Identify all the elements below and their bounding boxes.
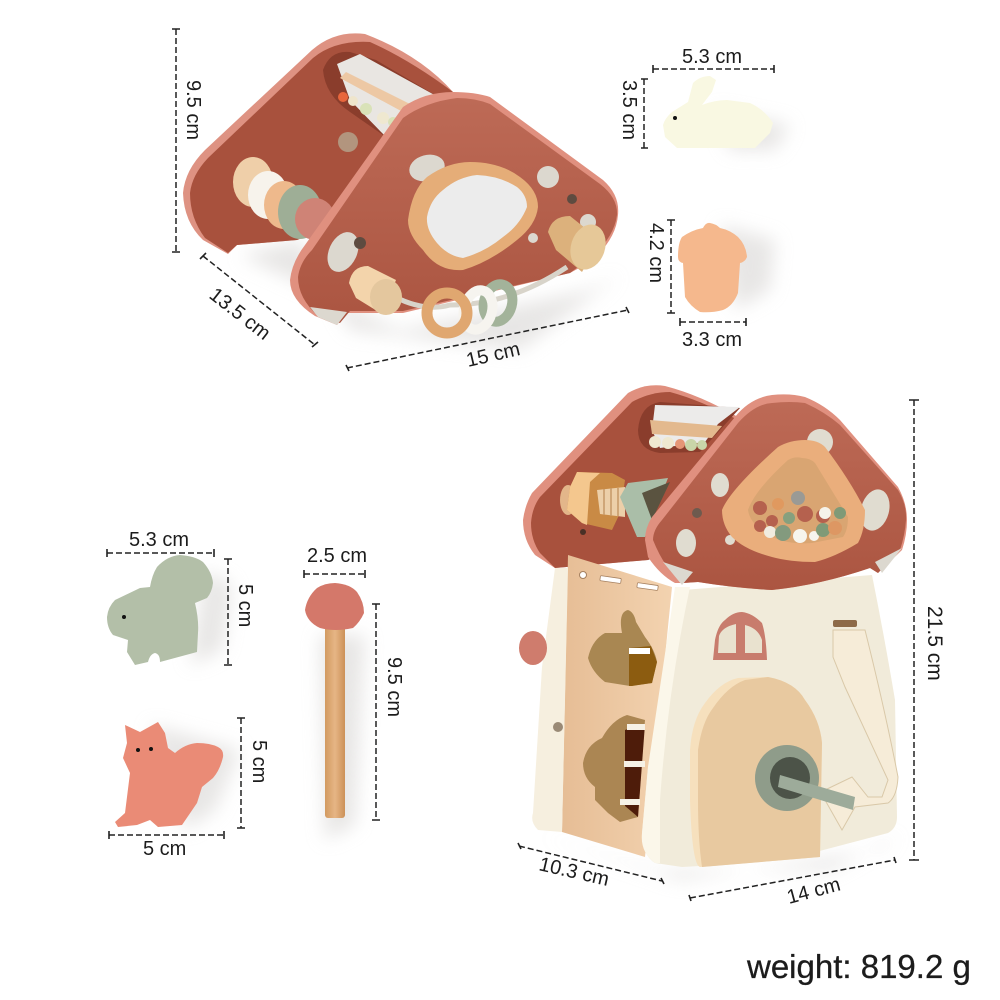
rabbit eye xyxy=(673,116,677,120)
rabbit dimensions: 5.3 cm xyxy=(682,46,742,68)
front mushroom panel edge xyxy=(290,92,618,325)
label 13.5 cm: 13.5 cm xyxy=(205,284,275,345)
green squirrel dimensions: 5.3 cm xyxy=(129,529,189,551)
front roof edge xyxy=(645,394,907,590)
rabbit shape hole xyxy=(588,610,657,686)
wire xyxy=(395,267,567,307)
rabbit piece xyxy=(663,76,773,148)
cream front wall xyxy=(642,575,897,867)
mallet dimensions xyxy=(304,545,405,820)
mallet dimensions: 2.5 cm xyxy=(307,545,367,567)
dimensions: top toy xyxy=(172,29,629,372)
front roof face xyxy=(653,402,906,590)
rattle tube xyxy=(638,402,740,453)
acorn piece xyxy=(678,223,747,312)
mirror frame and mirror xyxy=(408,162,538,270)
wood box side xyxy=(562,555,672,857)
squirrel eye xyxy=(122,615,126,619)
window xyxy=(713,612,767,660)
mallet xyxy=(305,583,364,818)
label 9.5 cm: 9.5 cm xyxy=(182,80,204,140)
toy: mushroom house xyxy=(519,385,907,867)
acorn dimensions: 4.2 cm xyxy=(645,223,667,283)
flower shape hole xyxy=(583,715,645,822)
label 15 cm: 15 cm xyxy=(464,338,522,372)
wood pegs xyxy=(349,216,611,315)
strap slot xyxy=(833,620,857,627)
fox eyes xyxy=(136,747,153,752)
rabbit dimensions: 3.5 cm xyxy=(618,80,640,140)
key lock xyxy=(755,745,855,811)
dimensions: house xyxy=(518,400,946,909)
rabbit dimensions xyxy=(618,46,774,148)
side pink ball xyxy=(519,631,547,665)
door xyxy=(690,677,822,867)
screws xyxy=(567,194,577,204)
green squirrel piece xyxy=(107,555,213,665)
fox dimensions: 5 cm xyxy=(143,838,186,860)
rattle tube xyxy=(323,52,440,135)
fox dimensions: 5 cm xyxy=(248,740,270,783)
notch xyxy=(310,307,347,325)
back mushroom panel xyxy=(183,33,453,254)
fox dimensions xyxy=(109,718,270,860)
dimensions: house: 21.5 cm xyxy=(923,606,946,681)
toy: mushroom activity top view xyxy=(183,33,618,333)
coral fox piece xyxy=(115,722,223,827)
white spots xyxy=(406,151,448,185)
green squirrel dimensions xyxy=(107,529,256,665)
rings xyxy=(427,281,516,333)
weight label: weight: 819.2 g xyxy=(746,948,971,985)
rivet xyxy=(338,132,358,152)
bead window xyxy=(722,440,865,562)
mallet dimensions: 9.5 cm xyxy=(383,657,405,717)
soft shadows xyxy=(150,110,900,880)
bead abacus xyxy=(233,157,335,240)
rivet xyxy=(553,722,563,732)
front mushroom panel face xyxy=(298,98,617,323)
back roof edge xyxy=(523,385,738,568)
acorn dimensions xyxy=(645,220,746,351)
acorn dimensions: 3.3 cm xyxy=(682,329,742,351)
roof notches xyxy=(663,562,693,585)
fabric strap xyxy=(825,630,898,830)
dimensions: house: 14 cm xyxy=(785,873,843,909)
slots xyxy=(580,572,658,591)
green squirrel dimensions: 5 cm xyxy=(234,584,256,627)
cream left side xyxy=(532,568,568,832)
roof spots xyxy=(711,473,729,497)
back roof face xyxy=(531,392,738,568)
wood nut and bolt xyxy=(560,472,670,537)
dimensions: house: 10.3 cm xyxy=(537,853,611,891)
